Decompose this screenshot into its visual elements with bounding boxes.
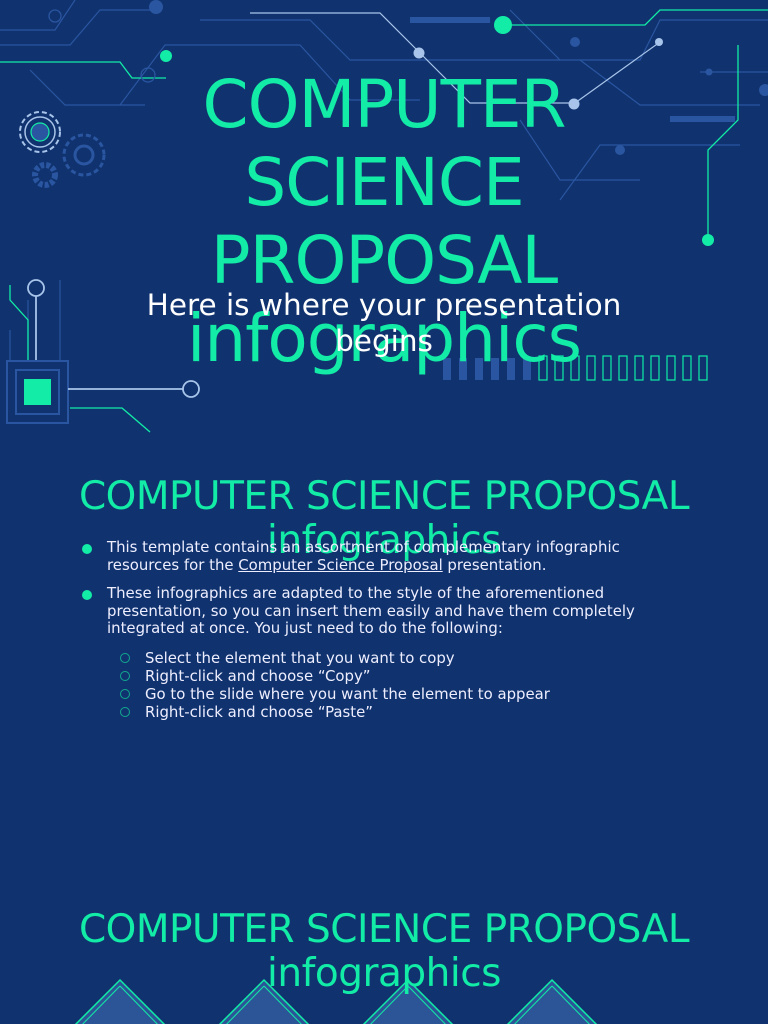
text block: instructions	[82, 538, 635, 721]
heading: section 2	[79, 474, 690, 563]
bullet 1	[82, 538, 620, 574]
diamonds row	[75, 979, 597, 1024]
icon: chip	[7, 280, 199, 423]
bullet 2: presentation, so you can insert them easily and have them completely	[107, 602, 635, 620]
icon: gears	[20, 112, 104, 185]
heading: section 3	[79, 907, 690, 996]
title: infographics	[187, 300, 581, 377]
sub-bullets	[120, 649, 550, 721]
sub-bullets: Select the element that you want to copy	[145, 649, 455, 667]
title: SCIENCE	[244, 144, 524, 221]
heading: section 3: infographics	[267, 951, 501, 996]
heading: section 2: infographics	[267, 518, 501, 563]
title: COMPUTER	[203, 66, 565, 143]
bars decoration	[443, 358, 531, 380]
background circuit decoration	[0, 0, 768, 432]
subtitle	[147, 288, 621, 358]
subtitle: begins	[335, 324, 433, 358]
bullet 2: integrated at once. You just need to do the following:	[107, 619, 503, 637]
sub-bullets: Go to the slide where you want the element to appear	[145, 685, 550, 703]
bullet 2: These infographics are adapted to the style of the aforementioned	[107, 584, 604, 602]
sub-bullets: Right-click and choose “Copy”	[145, 667, 371, 685]
title	[187, 66, 581, 377]
bullet 1: This template contains an assortment of complementary infographic	[107, 538, 620, 556]
bullet 2	[82, 584, 635, 637]
subtitle: Here is where your presentation	[147, 288, 621, 322]
heading: section 2: COMPUTER SCIENCE PROPOSAL	[79, 474, 689, 519]
bullet 1: resources for the Computer Science Proposal presentation.	[107, 556, 546, 574]
heading: section 3: COMPUTER SCIENCE PROPOSAL	[79, 907, 689, 952]
title: PROPOSAL	[211, 222, 557, 299]
sub-bullets: Right-click and choose “Paste”	[145, 703, 373, 721]
